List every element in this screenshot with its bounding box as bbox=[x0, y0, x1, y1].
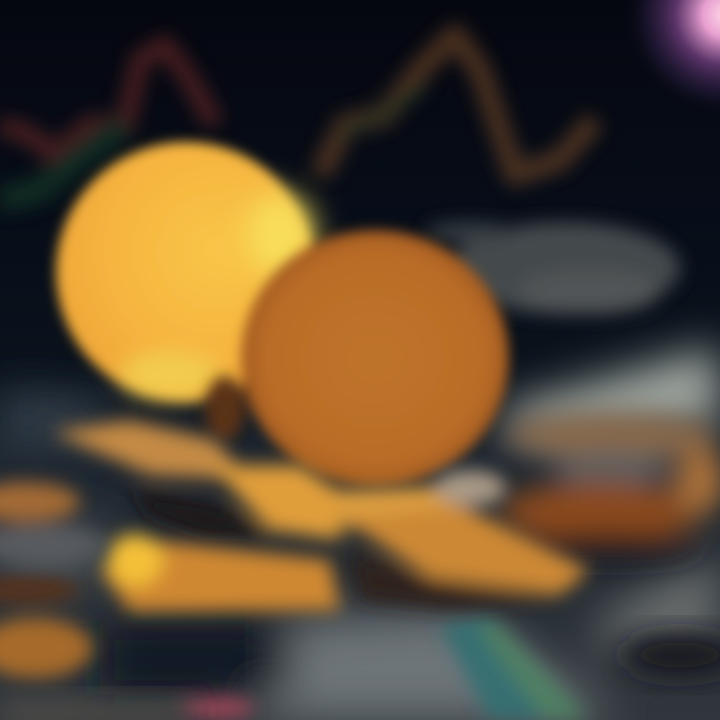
blurred stock chart, left bbox=[0, 45, 215, 200]
right stack of coins bbox=[500, 415, 720, 562]
rainbow reflection bbox=[175, 615, 590, 720]
yellow coin bbox=[56, 142, 316, 402]
lower gold bar with highlight bbox=[100, 534, 340, 612]
blurred stock chart, right bbox=[320, 35, 595, 175]
grey disc bbox=[425, 222, 680, 314]
left stack of coins bbox=[0, 482, 105, 678]
orange coin bbox=[205, 230, 509, 486]
lower surfaces bbox=[0, 345, 720, 720]
pink light glow bbox=[625, 0, 720, 115]
foreground strip bbox=[0, 698, 190, 720]
central gold bars bbox=[52, 420, 590, 610]
dark shadow, lower right bbox=[620, 633, 720, 677]
